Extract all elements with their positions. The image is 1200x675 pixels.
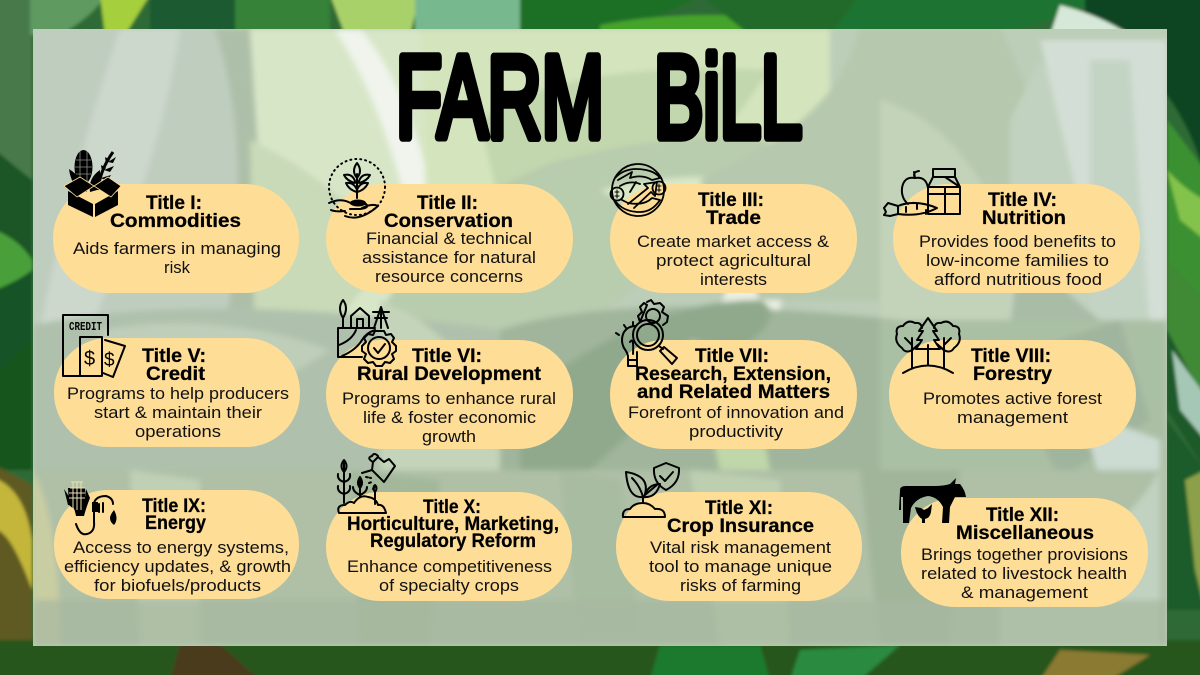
description: protect agricultural [656, 252, 811, 270]
heading [667, 498, 814, 537]
description: growth [422, 428, 476, 446]
description: Programs to enhance rural [342, 390, 556, 408]
heading: Conservation [384, 211, 513, 232]
heading [142, 346, 206, 385]
panel: Title XI Crop Insurance [616, 463, 862, 601]
description: Enhance competitiveness [347, 558, 552, 576]
heading: Title III: [698, 190, 764, 211]
heading [971, 346, 1052, 385]
description: of specialty crops [379, 577, 519, 595]
icon: credit card and dollar bills: $ [84, 348, 95, 370]
description: Vital risk management [650, 539, 831, 557]
heading: Energy [145, 513, 206, 534]
heading: Miscellaneous [956, 523, 1094, 544]
description [342, 390, 556, 446]
description: Programs to help producers [67, 385, 289, 403]
icon: farmland, house, pylon and gear [338, 300, 396, 366]
description: Create market access & [637, 233, 829, 251]
heading [347, 497, 559, 552]
description [362, 230, 536, 286]
panel: Title III Trade [610, 164, 857, 293]
icon: seedling with shield [623, 463, 679, 517]
heading [110, 193, 241, 232]
heading [357, 346, 542, 385]
panel: Title IX Energy [54, 482, 299, 599]
description: & management [961, 584, 1088, 602]
panel: Title II Conservation [326, 159, 573, 293]
panel: Title I Commodities [53, 150, 299, 293]
description [628, 404, 844, 441]
heading: Forestry [973, 364, 1052, 385]
description: resource concerns [375, 268, 523, 286]
description [919, 233, 1116, 289]
heading: Title XII: [986, 505, 1059, 526]
description: productivity [689, 423, 784, 441]
description [923, 390, 1102, 427]
panel: Title VIII Forestry [889, 318, 1136, 449]
heading: Title VI: [412, 346, 482, 367]
icon: gear, bulb and magnifier [616, 300, 677, 366]
heading: Title II: [417, 193, 478, 214]
description: for biofuels/products [94, 577, 261, 595]
heading: Rural Development [357, 364, 542, 385]
heading: Title V: [142, 346, 206, 367]
panel: Title VI Rural Development [326, 300, 573, 449]
description: Forefront of innovation and [628, 404, 844, 422]
heading: and Related Matters [637, 382, 830, 403]
heading: Title IV: [988, 190, 1057, 211]
icon: trees on a hill [896, 318, 960, 373]
icon: credit card and dollar bills [63, 315, 125, 377]
description: efficiency updates, & growth [64, 558, 291, 576]
description [649, 539, 832, 595]
heading: Trade [706, 208, 761, 229]
description: life & foster economic [363, 409, 536, 427]
heading: Regulatory Reform [370, 531, 536, 552]
heading: Title IX: [142, 496, 206, 517]
heading: Title XI: [705, 498, 773, 519]
icon: plants and watering can [338, 454, 395, 513]
description: Access to energy systems, [73, 539, 289, 557]
heading: Horticulture, Marketing, [347, 514, 559, 535]
heading: Credit [146, 364, 206, 385]
heading [982, 190, 1066, 229]
description: start & maintain their [94, 404, 263, 422]
heading: Commodities [110, 211, 241, 232]
heading: Crop Insurance [667, 516, 814, 537]
heading: Title X: [423, 497, 481, 518]
title: FARM BiLL: FARM [396, 32, 604, 162]
panel: Title IV Nutrition [884, 169, 1140, 293]
description [73, 240, 281, 277]
description [67, 385, 289, 441]
description [64, 539, 291, 595]
icon: plant in hand [329, 159, 385, 218]
heading [956, 505, 1094, 544]
description: tool to manage unique [649, 558, 832, 576]
description: low-income families to [926, 252, 1109, 270]
icon: box with corn and wheat [64, 150, 121, 217]
heading [698, 190, 764, 229]
title: FARM BiLL: BiLL [654, 32, 802, 162]
heading: Title I: [146, 193, 202, 214]
description: Financial & technical [366, 230, 532, 248]
heading: Research, Extension, [635, 364, 831, 385]
description [921, 546, 1128, 602]
description: interests [700, 271, 767, 289]
description: risks of farming [680, 577, 801, 595]
description: operations [135, 423, 221, 441]
description [637, 233, 829, 289]
description: Promotes active forest [923, 390, 1102, 408]
heading: Title VIII: [971, 346, 1051, 367]
icon: apple, carrot and milk carton [884, 169, 960, 216]
heading: Title VII: [695, 346, 769, 367]
heading [142, 496, 206, 534]
description: afford nutritious food [934, 271, 1102, 289]
panel: Title XII Miscellaneous [899, 478, 1148, 607]
icon: credit card and dollar bills: CREDIT [69, 320, 102, 334]
description: management [957, 409, 1068, 427]
description [347, 558, 552, 595]
description: Brings together provisions [921, 546, 1128, 564]
panel: Title VII Research [610, 300, 857, 449]
icon: corn and fuel nozzle [64, 482, 116, 534]
panel: Title X Horticulture [326, 454, 572, 601]
description: assistance for natural [362, 249, 536, 267]
heading [635, 346, 831, 403]
icon: globe with trade arrows and coins [610, 164, 666, 216]
heading [384, 193, 513, 232]
icon: credit card and dollar bills: $ [104, 350, 115, 371]
icon: cow and hen [899, 478, 966, 523]
description: Provides food benefits to [919, 233, 1116, 251]
heading: Nutrition [982, 208, 1066, 229]
description: Aids farmers in managing [73, 240, 281, 258]
description: related to livestock health [921, 565, 1127, 583]
description: risk [164, 259, 191, 277]
panel: Title V Credit [54, 315, 300, 447]
